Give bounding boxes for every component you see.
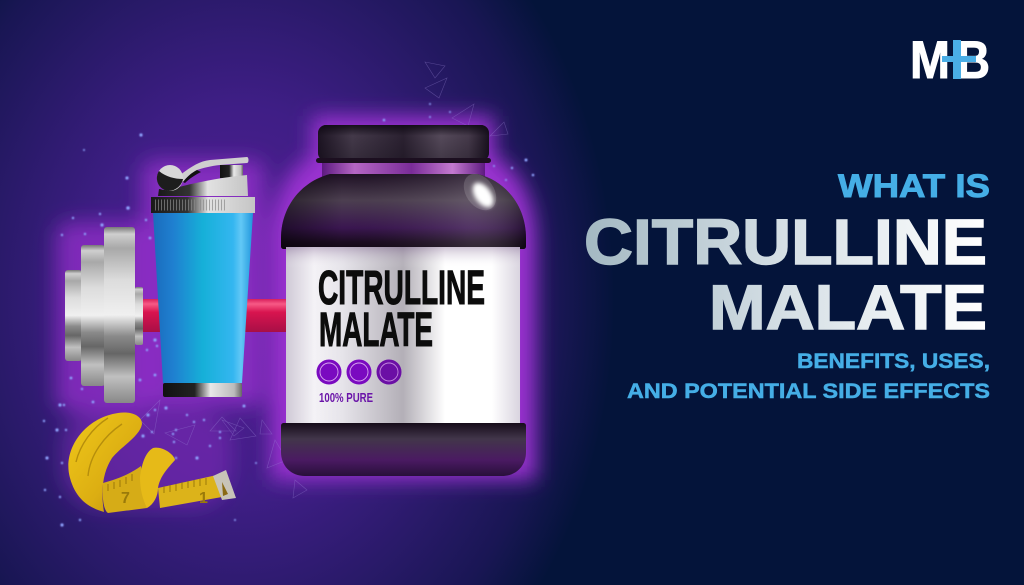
logo: M <box>910 31 950 90</box>
tape markings <box>108 474 206 493</box>
title: citrulline malate: CITRULLINE <box>584 206 987 278</box>
title: citrulline malate: MALATE <box>709 273 987 343</box>
measuring tape <box>68 412 236 513</box>
heading: what is: WHAT IS <box>838 168 990 204</box>
subtitle: BENEFITS, USES, <box>797 350 990 373</box>
measuring tape: 1 <box>199 490 208 507</box>
jar base <box>281 423 526 476</box>
jar label heading: CITRULLINE <box>318 262 485 315</box>
jar neck <box>322 163 485 177</box>
logo: B <box>957 31 990 90</box>
label tagline: 100% PURE <box>319 390 373 405</box>
weight plates <box>65 227 143 403</box>
purple glow behind products <box>56 116 536 508</box>
dumbbell bar <box>140 299 164 332</box>
shaker cup <box>153 213 253 383</box>
subtitle <box>627 350 990 403</box>
purple label dots <box>317 360 401 384</box>
tape metal tip <box>213 470 236 500</box>
jar label heading: MALATE <box>319 304 433 357</box>
starry particles <box>43 103 534 527</box>
tape numerals: 7 <box>121 490 130 507</box>
shaker bottle <box>151 157 255 397</box>
supplement jar <box>281 125 526 476</box>
shaker collar <box>151 197 255 213</box>
title: citrulline malate <box>584 206 987 343</box>
jar label heading <box>318 262 485 357</box>
shaker base <box>163 383 242 397</box>
faint triangles <box>140 62 508 498</box>
shaker flip lid <box>157 157 248 196</box>
jar lid <box>318 125 489 161</box>
subtitle: AND POTENTIAL SIDE EFFECTS <box>627 380 990 403</box>
jar highlight <box>457 168 503 216</box>
jar shoulder <box>281 174 526 249</box>
dumbbell <box>65 227 290 403</box>
logo <box>910 31 990 90</box>
jar label <box>286 247 520 424</box>
